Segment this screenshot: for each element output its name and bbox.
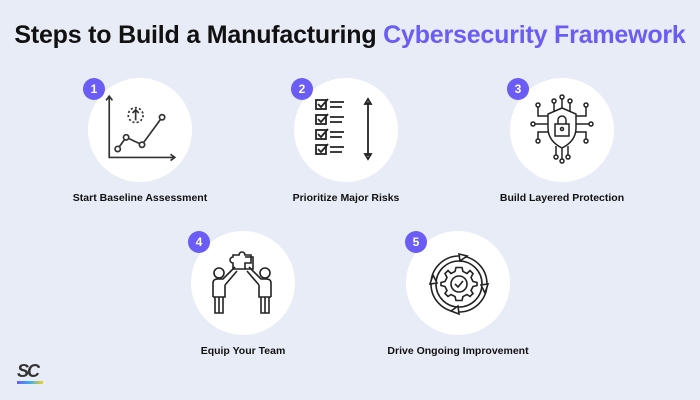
- icon: chart: [105, 94, 176, 162]
- badge 3: 3: [515, 82, 521, 96]
- icon: checklist: [315, 97, 372, 161]
- badge 5: 5: [413, 235, 419, 249]
- label 3: Build Layered Protection: [500, 192, 624, 204]
- label 5: Drive Ongoing Improvement: [387, 345, 529, 357]
- label 4: Equip Your Team: [201, 345, 285, 357]
- circle 4: [191, 231, 295, 335]
- step 3: [500, 78, 624, 204]
- label 1: Start Baseline Assessment: [73, 192, 207, 204]
- badge 3: [507, 78, 529, 100]
- badge 4: 4: [196, 235, 202, 249]
- circle 3: [510, 78, 614, 182]
- label 2: Prioritize Major Risks: [293, 192, 399, 204]
- logo: SC: [17, 361, 38, 381]
- step 2: [291, 78, 399, 204]
- badge 1: 1: [91, 82, 97, 96]
- icon: cycle gear: [428, 252, 490, 316]
- circle 2: [294, 78, 398, 182]
- icon: shield circuit: [530, 94, 594, 164]
- title: Steps to Build a Manufacturing Cybersecurity Framework: [14, 21, 686, 49]
- step 5: [387, 231, 529, 357]
- step 1: [73, 78, 208, 204]
- badge 2: 2: [299, 82, 305, 96]
- badge 2: [291, 78, 313, 100]
- step 4: [188, 231, 295, 357]
- icon: team puzzle: [212, 251, 272, 314]
- circle 1: [88, 78, 192, 182]
- badge 1: [83, 78, 105, 100]
- badge 5: [405, 231, 427, 253]
- badge 4: [188, 231, 210, 253]
- circle 5: [406, 231, 510, 335]
